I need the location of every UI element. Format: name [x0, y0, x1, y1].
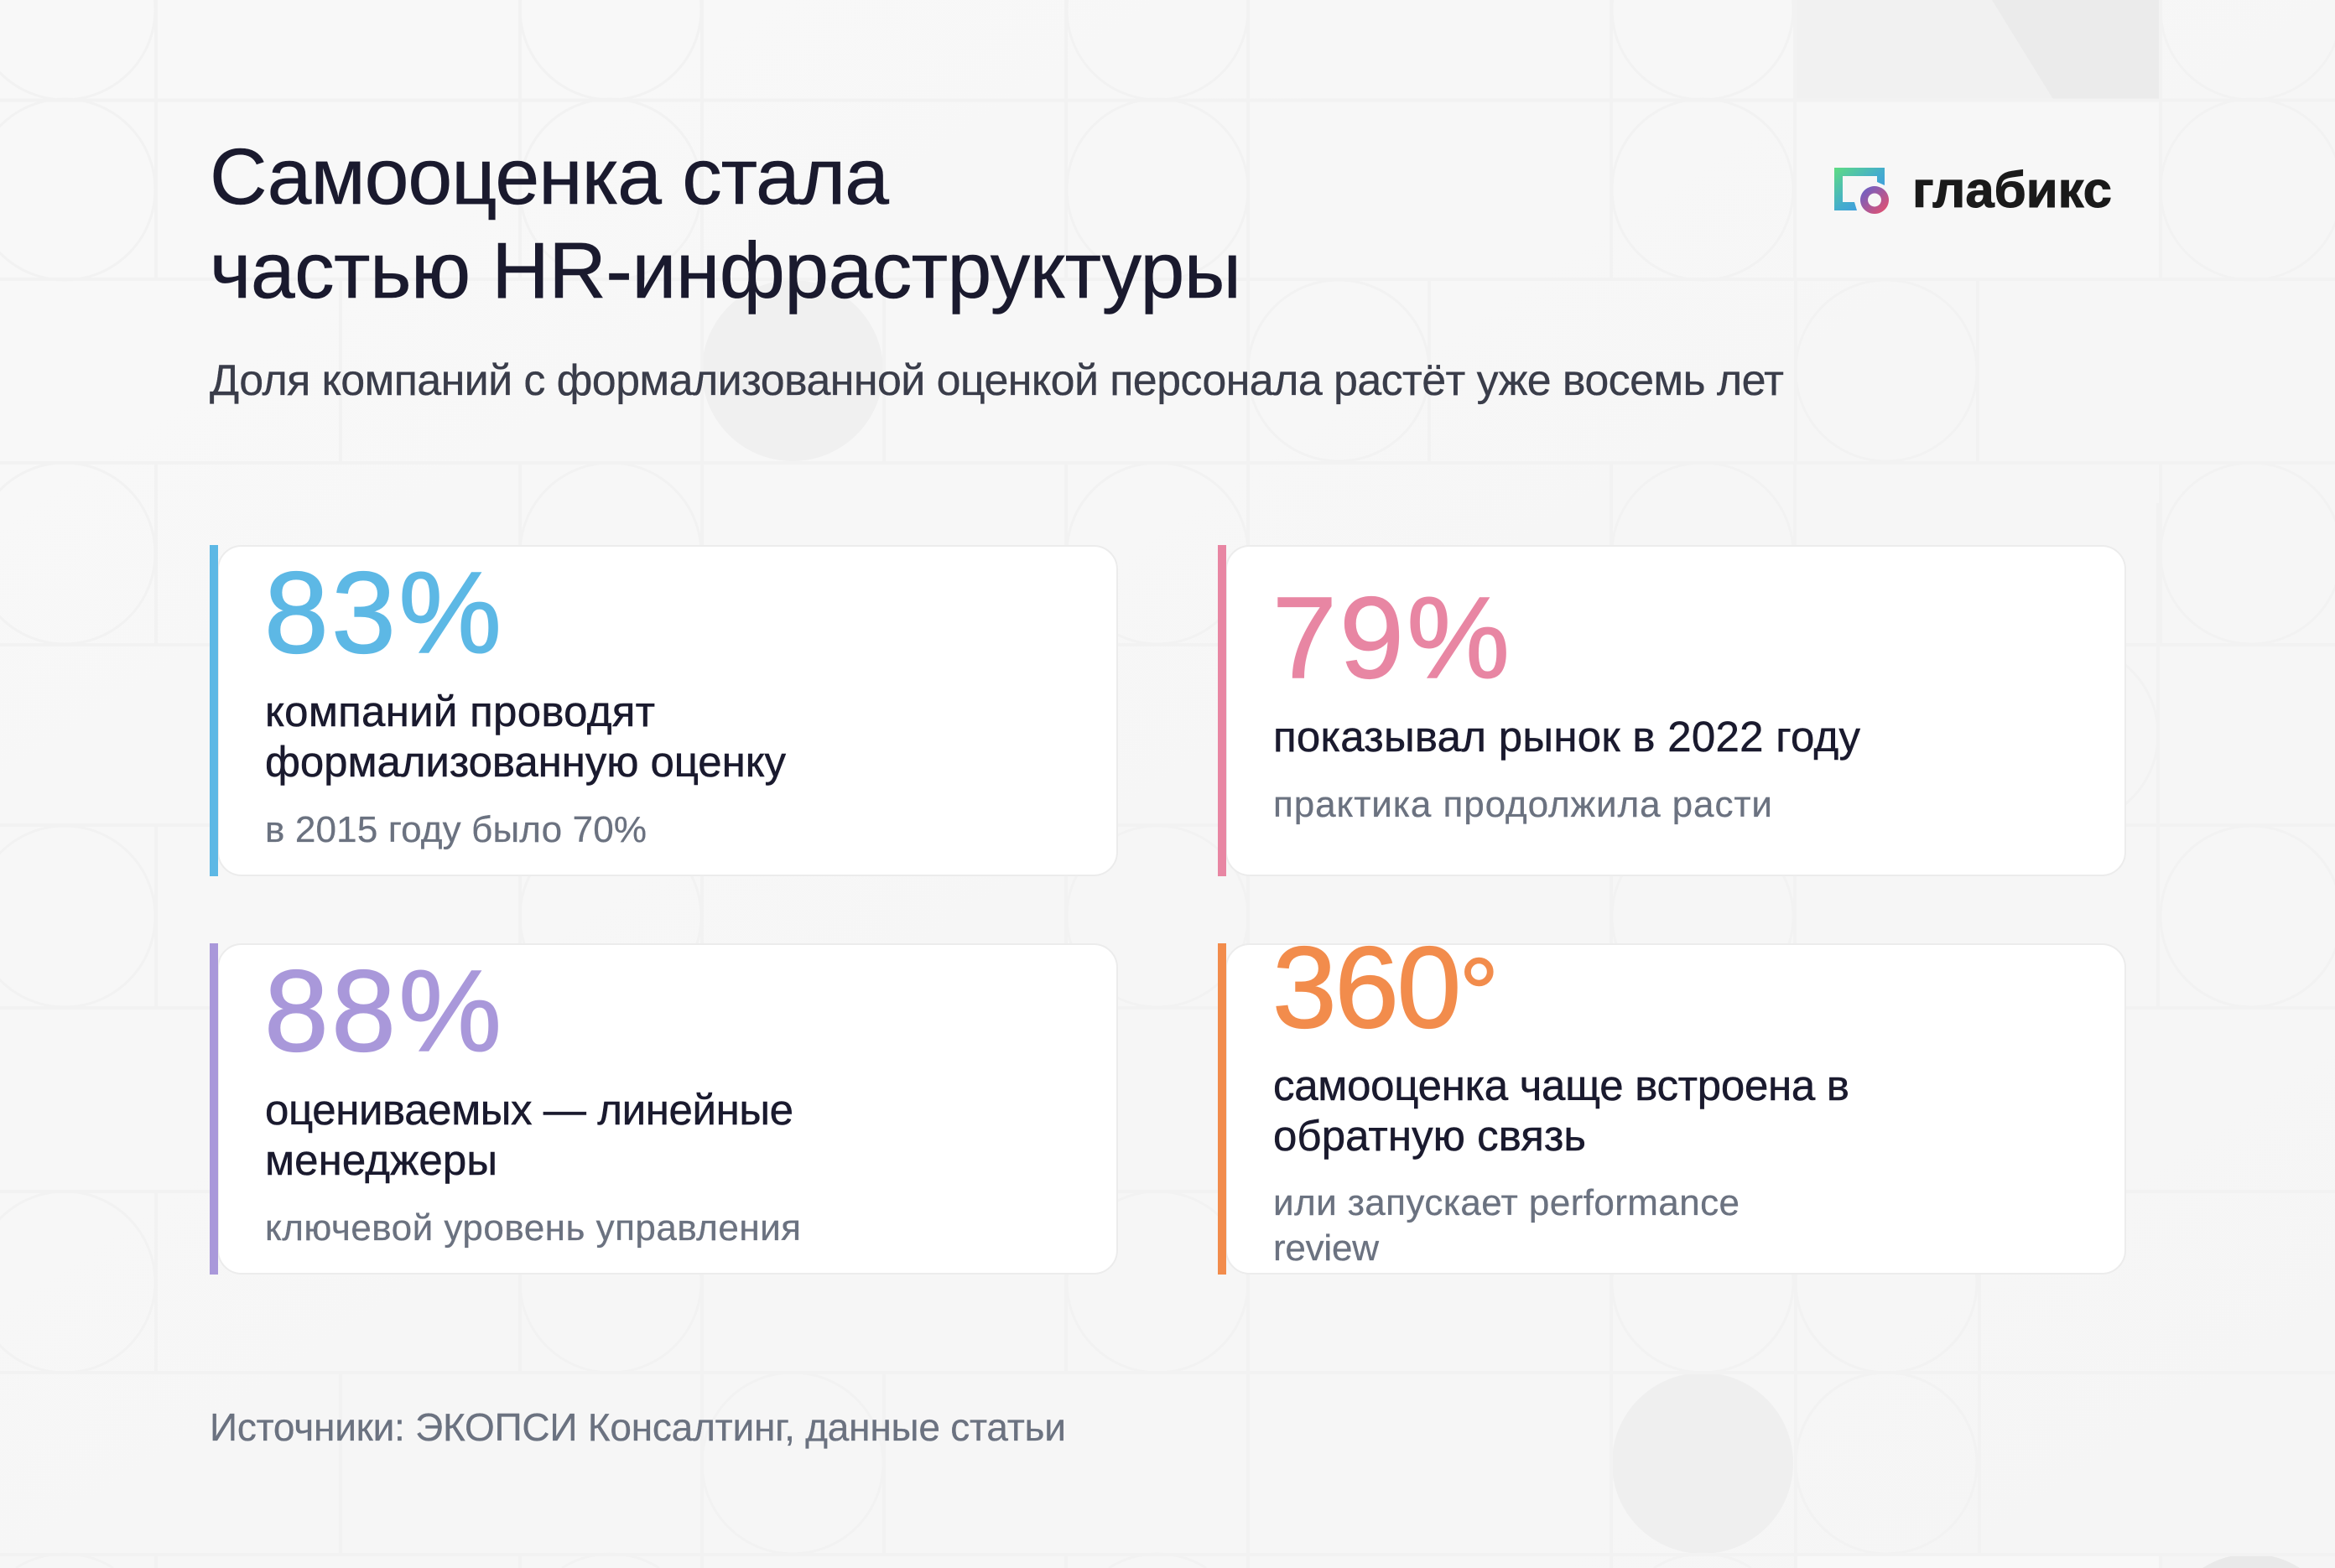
description	[265, 1086, 793, 1184]
note: в 2015 году было 70%	[265, 809, 647, 850]
description: оцениваемых — линейные	[265, 1086, 793, 1134]
description: самооценка чаще встроена в	[1273, 1062, 1849, 1109]
description	[265, 688, 787, 786]
logo wordmark: глабикс	[1912, 162, 2112, 218]
note: практика продолжила расти	[1273, 784, 1772, 825]
note: review	[1273, 1228, 1379, 1269]
title: частью HR-инфраструктуры	[210, 226, 1241, 315]
stat: 83%: 83%	[264, 548, 502, 678]
title: Самооценка стала	[210, 132, 889, 221]
panel: card 360°	[1218, 923, 2125, 1275]
stat: 88%: 88%	[264, 947, 502, 1076]
stat: 360°: 360°	[1272, 923, 1499, 1052]
note: или запускает performance	[1273, 1182, 1740, 1223]
title	[210, 132, 1241, 315]
source: Источники: ЭКОПСИ Консалтинг, данные статьи	[210, 1405, 1066, 1449]
panel: card 88%	[210, 943, 1117, 1275]
panel: card 79%	[1218, 545, 2125, 876]
description: обратную связь	[1273, 1112, 1586, 1160]
icon: logo mark	[1834, 168, 1889, 214]
logo: глабикс	[1834, 162, 2112, 218]
note: ключевой уровень управления	[265, 1207, 801, 1249]
stat: 79%: 79%	[1272, 574, 1510, 703]
description: показывал рынок в 2022 году	[1273, 713, 1860, 761]
panel: card 83%	[210, 545, 1117, 876]
description: компаний проводят	[265, 688, 655, 735]
note	[1273, 1182, 1740, 1269]
description: менеджеры	[265, 1136, 497, 1184]
subtitle: Доля компаний с формализованной оценкой персонала растёт уже восемь лет	[210, 356, 1784, 405]
description	[1273, 1062, 1849, 1160]
description: формализованную оценку	[265, 738, 787, 786]
